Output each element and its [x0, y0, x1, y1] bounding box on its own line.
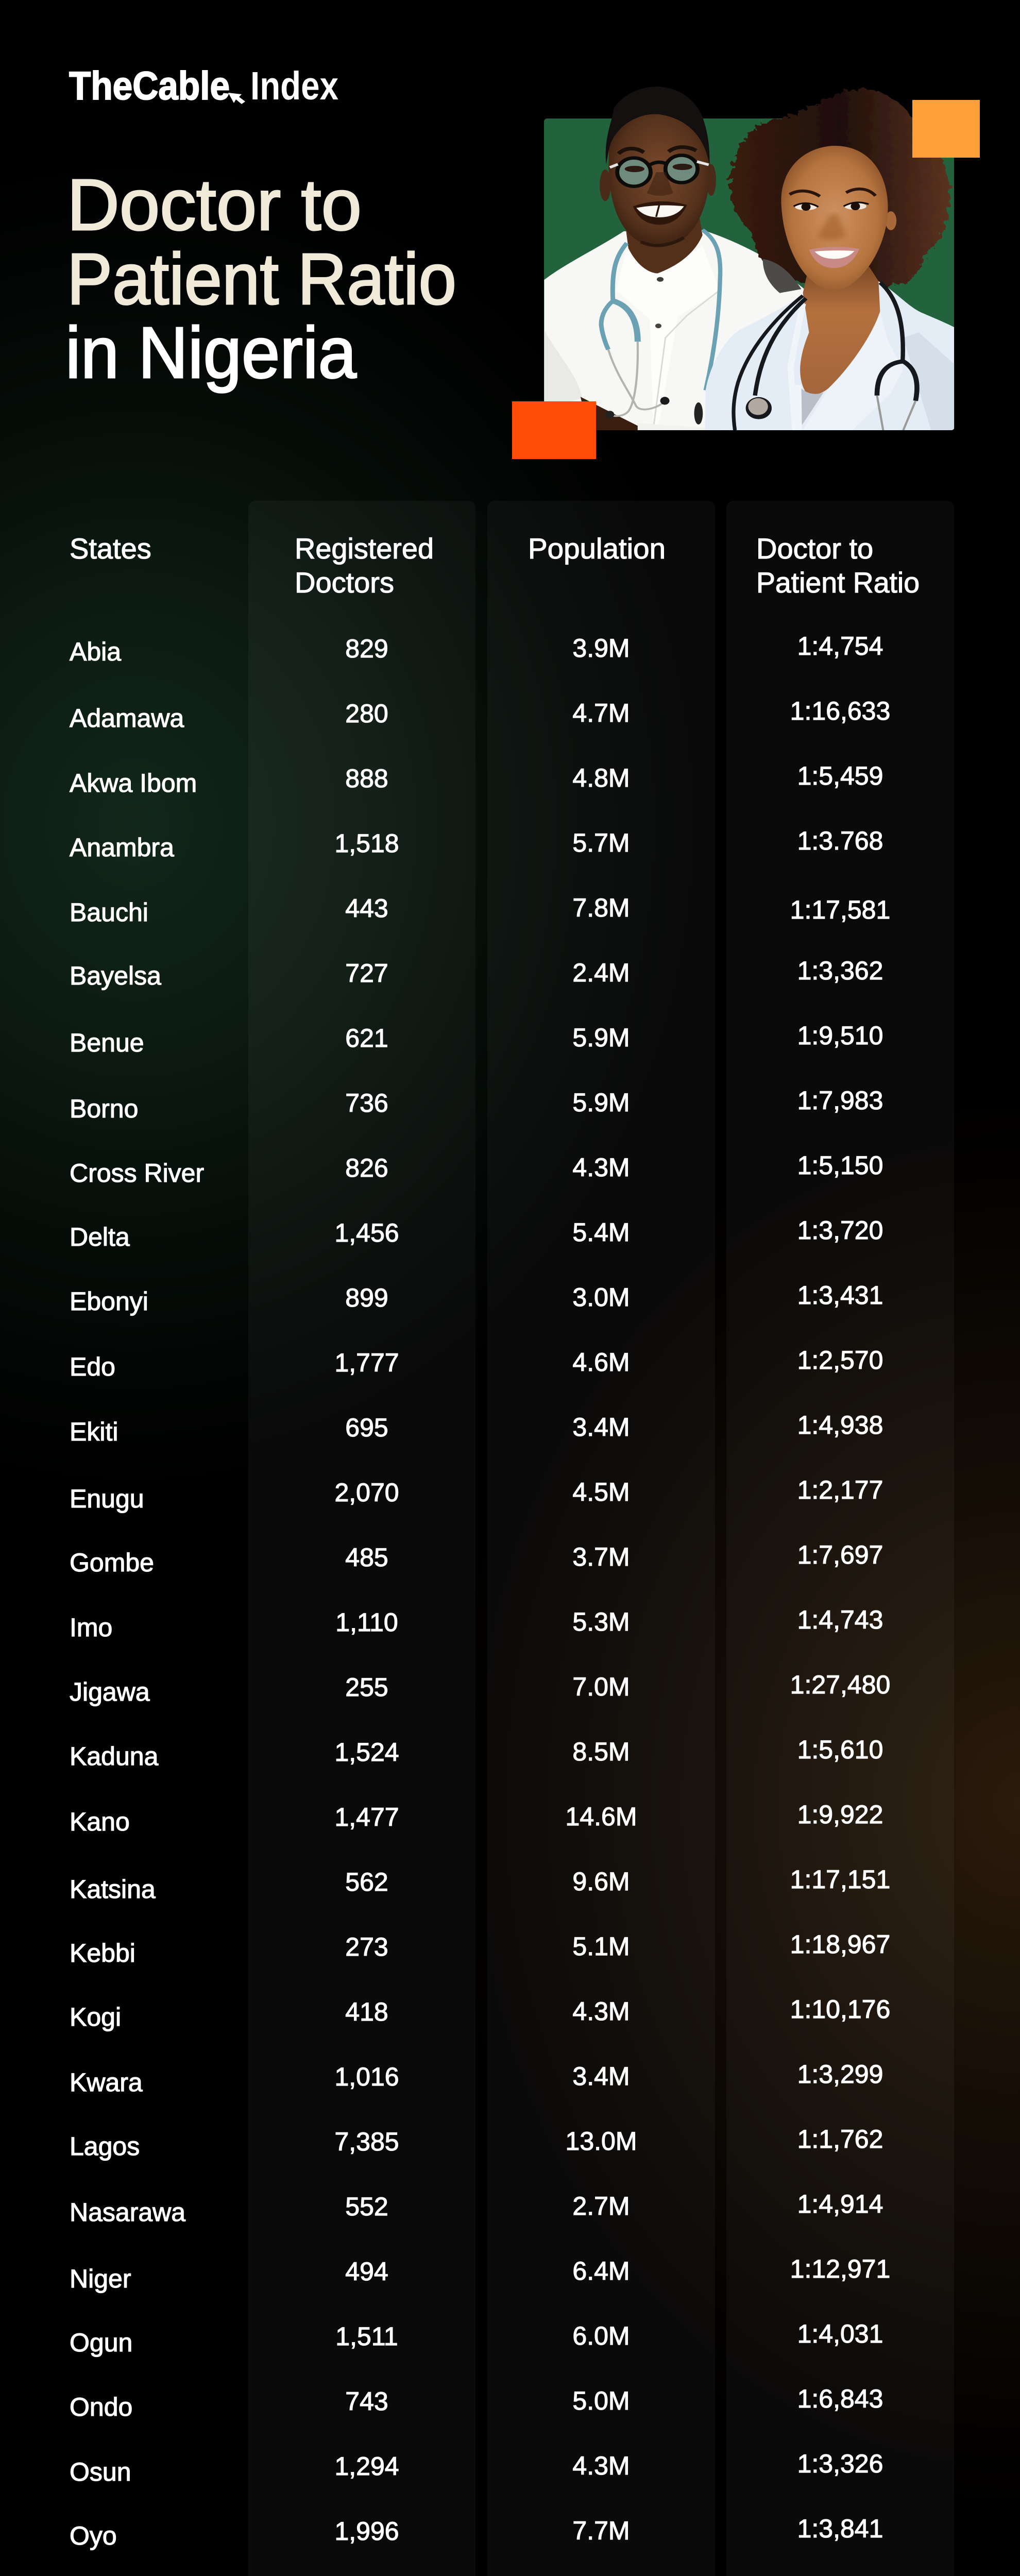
man: hair: [606, 87, 709, 164]
table column: states: Edo: [70, 1352, 115, 1381]
table column: doctor to patient ratio: 1:2,570: [797, 1346, 883, 1375]
title: in Nigeria: [65, 312, 357, 393]
title: [65, 164, 456, 393]
table column: doctor to patient ratio: 1:9,922: [797, 1800, 883, 1829]
table column: population: [487, 501, 715, 2576]
man: glasses: [617, 158, 651, 187]
table column: population: 3.7M: [572, 1543, 630, 1571]
man: brows: [619, 148, 644, 154]
column panel: [726, 501, 954, 2576]
table column: population: 5.9M: [572, 1088, 630, 1117]
table column: doctor to patient ratio: 1:3.768: [797, 826, 883, 855]
table column: states: Bauchi: [70, 898, 148, 927]
table column: registered doctors: 255: [345, 1673, 388, 1702]
table column: states: Cross River: [70, 1159, 204, 1188]
table column: states: Delta: [70, 1223, 130, 1251]
woman: brows: [790, 191, 820, 196]
table column: registered doctors: 280: [345, 699, 388, 728]
logo: TheCable Index: Index: [250, 64, 338, 108]
table column: doctor to patient ratio: 1:3,326: [797, 2449, 883, 2478]
table column: registered doctors: 736: [345, 1089, 388, 1117]
table column: doctor to patient ratio: 1:10,176: [790, 1995, 890, 2024]
woman: hair: [730, 88, 950, 285]
table column: states: Abia: [70, 637, 121, 666]
table column: states: Kano: [70, 1807, 130, 1836]
table column: doctor to patient ratio: 1:12,971: [790, 2255, 890, 2283]
woman: undershirt: [798, 385, 824, 430]
table column: doctor to patient ratio: 1:16,633: [790, 697, 890, 725]
table column: doctor to patient ratio: 1:4,743: [797, 1605, 883, 1634]
table column: states: Nasarawa: [70, 2198, 185, 2227]
table column: registered doctors: 273: [345, 1933, 388, 1961]
table column: registered doctors: 1,477: [334, 1803, 399, 1832]
table column: registered doctors: 727: [345, 959, 388, 988]
man: mouth: [633, 201, 687, 225]
woman: shadow of hair on man's coat: [763, 259, 802, 293]
table column: states: Ekiti: [70, 1417, 118, 1446]
accent: red square: [512, 401, 596, 459]
woman: lapel: [803, 311, 903, 430]
table column: population: 5.1M: [572, 1932, 630, 1961]
table column: states: Adamawa: [70, 704, 184, 733]
table column: doctor to patient ratio: 1:3,431: [797, 1281, 883, 1310]
table column: registered doctors: 1,294: [334, 2452, 399, 2481]
table column: states: Gombe: [70, 1548, 154, 1577]
table column: population: 14.6M: [566, 1802, 637, 1831]
table column: registered doctors: Doctors: [295, 566, 394, 599]
accent: orange square: [912, 100, 980, 158]
table column: doctor to patient ratio: 1:3,299: [797, 2060, 883, 2089]
table column: doctor to patient ratio: 1:4,754: [797, 632, 883, 660]
table column: population: 3.4M: [572, 1413, 630, 1442]
table column: doctor to patient ratio: 1:5,610: [797, 1735, 883, 1764]
table column: population: 4.3M: [572, 2451, 630, 2480]
table column: doctor to patient ratio: 1:17,151: [790, 1865, 890, 1894]
panel: doctors photo: [512, 87, 980, 459]
table column: doctor to patient ratio: 1:4,938: [797, 1411, 883, 1439]
man: nose: [647, 172, 673, 196]
table column: registered doctors: 1,524: [334, 1738, 399, 1767]
table column: doctor to patient ratio: [726, 501, 954, 2576]
table column: states: [70, 532, 204, 2576]
table column: doctor to patient ratio: 1:9,510: [797, 1021, 883, 1050]
table column: population: 4.5M: [572, 1478, 630, 1506]
woman: face: [886, 211, 896, 230]
table column: population: 4.8M: [572, 764, 630, 792]
table column: population: 5.9M: [572, 1023, 630, 1052]
table column: doctor to patient ratio: Patient Ratio: [756, 566, 920, 599]
table column: population: 6.4M: [572, 2257, 630, 2285]
logo: TheCable Index: [69, 64, 338, 108]
table column: states: Osun: [70, 2458, 131, 2486]
table column: population: 2.4M: [572, 958, 630, 987]
table column: doctor to patient ratio: 1:5,459: [797, 761, 883, 790]
table column: states: Kwara: [70, 2068, 143, 2097]
woman: neck and chest: [800, 267, 880, 395]
table column: registered doctors: 494: [345, 2257, 388, 2286]
table column: states: Kaduna: [70, 1742, 159, 1771]
table column: doctor to patient ratio: 1:3,720: [797, 1216, 883, 1245]
header: Registered Doctors: Registered: [295, 532, 434, 565]
table column: states: Kogi: [70, 2003, 121, 2031]
table column: population: 8.5M: [572, 1737, 630, 1766]
table column: population: 3.9M: [572, 634, 630, 663]
table column: registered doctors: 1,777: [334, 1348, 399, 1377]
table column: registered doctors: 2,070: [334, 1478, 399, 1507]
table column: registered doctors: 1,456: [334, 1218, 399, 1247]
table column: registered doctors: 621: [345, 1024, 388, 1053]
table column: doctor to patient ratio: 1:4,914: [797, 2190, 883, 2218]
woman: eyes: [795, 204, 817, 210]
column panel: [248, 501, 475, 2576]
table column: states: Oyo: [70, 2521, 117, 2550]
table column: states: Anambra: [70, 833, 174, 862]
table column: states: Ebonyi: [70, 1287, 148, 1316]
table column: population: 6.0M: [572, 2321, 630, 2350]
table column: doctor to patient ratio: 1:3,841: [797, 2514, 883, 2543]
table column: states: Kebbi: [70, 1939, 135, 1968]
header: States: States: [70, 532, 151, 565]
table column: doctor to patient ratio: 1:18,967: [790, 1930, 890, 1959]
table column: doctor to patient ratio: 1:27,480: [790, 1670, 890, 1699]
table column: registered doctors: 826: [345, 1154, 388, 1182]
table column: population: 4.6M: [572, 1348, 630, 1377]
table column: population: 4.3M: [572, 1153, 630, 1182]
table column: population: 4.7M: [572, 699, 630, 727]
woman: coat: [705, 281, 954, 430]
table column: registered doctors: 1,016: [334, 2062, 399, 2091]
table column: registered doctors: 485: [345, 1543, 388, 1572]
table column: doctor to patient ratio: 1:6,843: [797, 2384, 883, 2413]
table column: registered doctors: 7,385: [334, 2127, 399, 2156]
table column: population: 4.3M: [572, 1997, 630, 2026]
table column: doctor to patient ratio: 1:7,697: [797, 1540, 883, 1569]
table column: registered doctors: 743: [345, 2387, 388, 2416]
table column: states: Niger: [70, 2264, 131, 2293]
table column: states: Borno: [70, 1094, 138, 1123]
table column: population: 5.7M: [572, 828, 630, 857]
table column: doctor to patient ratio: 1:3,362: [797, 956, 883, 985]
table column: states: Enugu: [70, 1484, 144, 1513]
table column: states: Jigawa: [70, 1677, 150, 1706]
table column: population: 7.7M: [572, 2516, 630, 2545]
man: neck: [625, 217, 703, 274]
table column: registered doctors: 443: [345, 894, 388, 923]
table column: doctor to patient ratio: 1:4,031: [797, 2319, 883, 2348]
photo green backdrop: [544, 118, 954, 430]
woman: mouth: [809, 247, 859, 268]
table column: population: 5.0M: [572, 2386, 630, 2415]
icon: cursor arrow: [228, 93, 245, 104]
man: arm: [581, 397, 641, 430]
table column: states: Bayelsa: [70, 961, 161, 990]
table column: registered doctors: 829: [345, 634, 388, 663]
man: shirt buttons: [657, 277, 664, 282]
man: stethoscope: [601, 230, 720, 416]
table column: registered doctors: 1,518: [334, 829, 399, 858]
table column: states: Akwa Ibom: [70, 769, 197, 798]
table column: doctor to patient ratio: 1:17,581: [790, 895, 890, 924]
table column: states: Katsina: [70, 1875, 156, 1904]
table column: registered doctors: 418: [345, 1997, 388, 2026]
table column: registered doctors: 695: [345, 1413, 388, 1442]
title: Patient Ratio: [67, 238, 456, 319]
table column: doctor to patient ratio: 1:1,762: [797, 2125, 883, 2154]
table column: population: 5.3M: [572, 1607, 630, 1636]
table column: registered doctors: 562: [345, 1868, 388, 1896]
table column: registered doctors: 1,996: [334, 2517, 399, 2546]
table column: states: Ogun: [70, 2328, 132, 2357]
table column: registered doctors: 899: [345, 1283, 388, 1312]
table column: registered doctors: 888: [345, 764, 388, 793]
table column: population: 3.0M: [572, 1283, 630, 1312]
woman: stethoscope: [734, 282, 917, 430]
man: ears: [600, 170, 611, 201]
table column: states: Imo: [70, 1613, 112, 1642]
table column: registered doctors: 552: [345, 2192, 388, 2221]
table column: population: 7.8M: [572, 893, 630, 922]
table column: doctor to patient ratio: 1:5,150: [797, 1151, 883, 1180]
header: Doctor to Patient Ratio: Doctor to: [756, 532, 873, 565]
table column: registered doctors: 1,511: [335, 2322, 398, 2351]
man: chin beard: [641, 238, 684, 246]
table column: population: 9.6M: [572, 1867, 630, 1896]
table column: states: Benue: [70, 1028, 144, 1057]
table column: states: Ondo: [70, 2393, 132, 2421]
table column: doctor to patient ratio: 1:2,177: [797, 1476, 883, 1504]
man: coat: [544, 230, 806, 430]
table column: population: 13.0M: [566, 2127, 637, 2156]
illustration: two doctors: [544, 87, 954, 430]
logo: TheCable Index: TheCable: [69, 64, 230, 108]
man: face: [608, 112, 710, 247]
table column: registered doctors: 1,110: [335, 1608, 398, 1637]
table column: states: Lagos: [70, 2132, 140, 2161]
table column: registered doctors: [248, 501, 475, 2576]
table column: population: 3.4M: [572, 2062, 630, 2091]
table column: population: 7.0M: [572, 1672, 630, 1701]
header: Population: Population: [528, 532, 666, 565]
table column: population: 5.4M: [572, 1218, 630, 1247]
table column: doctor to patient ratio: 1:7,983: [797, 1086, 883, 1115]
column panel: [487, 501, 715, 2576]
table column: population: 2.7M: [572, 2192, 630, 2221]
title: Doctor to: [67, 164, 362, 245]
woman: nose: [818, 214, 846, 240]
